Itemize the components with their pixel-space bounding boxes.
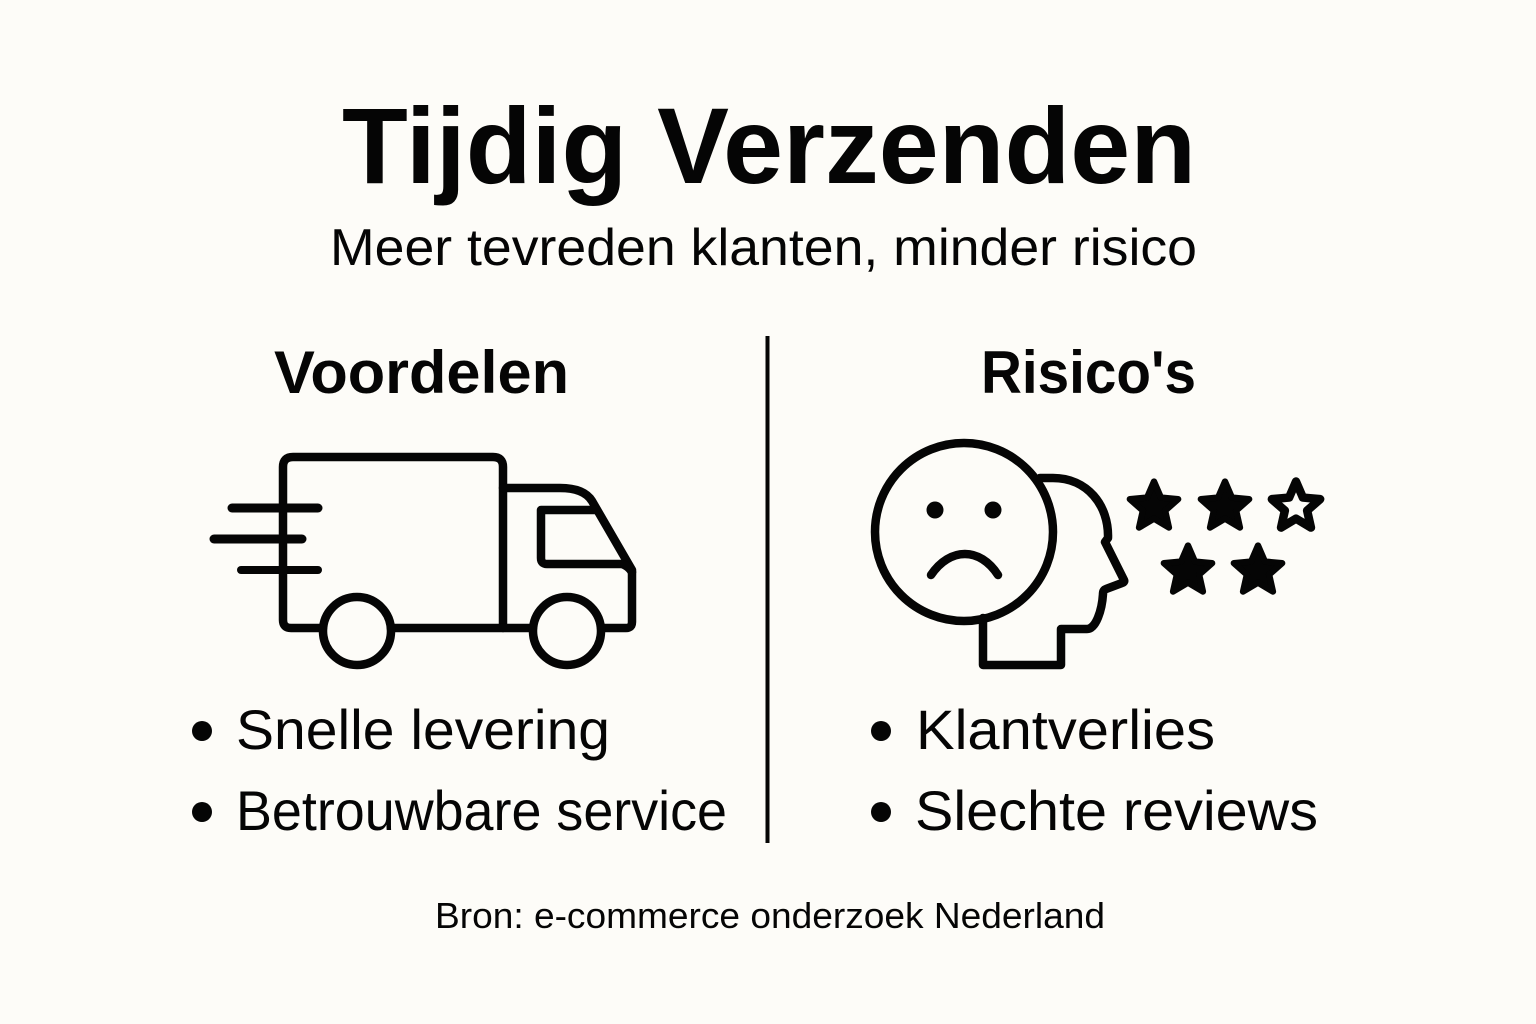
bullet: slechte reviews: Slechte reviews xyxy=(915,779,1318,842)
source note: Bron: e-commerce onderzoek Nederland xyxy=(435,895,1105,936)
icon: star rating xyxy=(1130,482,1320,592)
vertical divider xyxy=(766,336,770,843)
icon: sad face with head profile xyxy=(875,443,1124,665)
bullet: snelle levering: Snelle levering xyxy=(236,698,610,761)
bullet: betrouwbare service: Betrouwbare service xyxy=(236,779,727,842)
heading: voordelen: Voordelen xyxy=(274,339,569,406)
icon: delivery truck xyxy=(214,457,632,665)
title: Tijdig Verzenden xyxy=(342,85,1196,206)
risks list xyxy=(871,698,1318,842)
bullet: klantverlies: Klantverlies xyxy=(916,698,1215,761)
benefits list xyxy=(192,698,727,842)
heading: risico's: Risico's xyxy=(981,339,1196,406)
subtitle: Meer tevreden klanten, minder risico xyxy=(330,219,1197,277)
panel: voordelen xyxy=(192,339,727,842)
panel: risico's xyxy=(871,339,1320,842)
